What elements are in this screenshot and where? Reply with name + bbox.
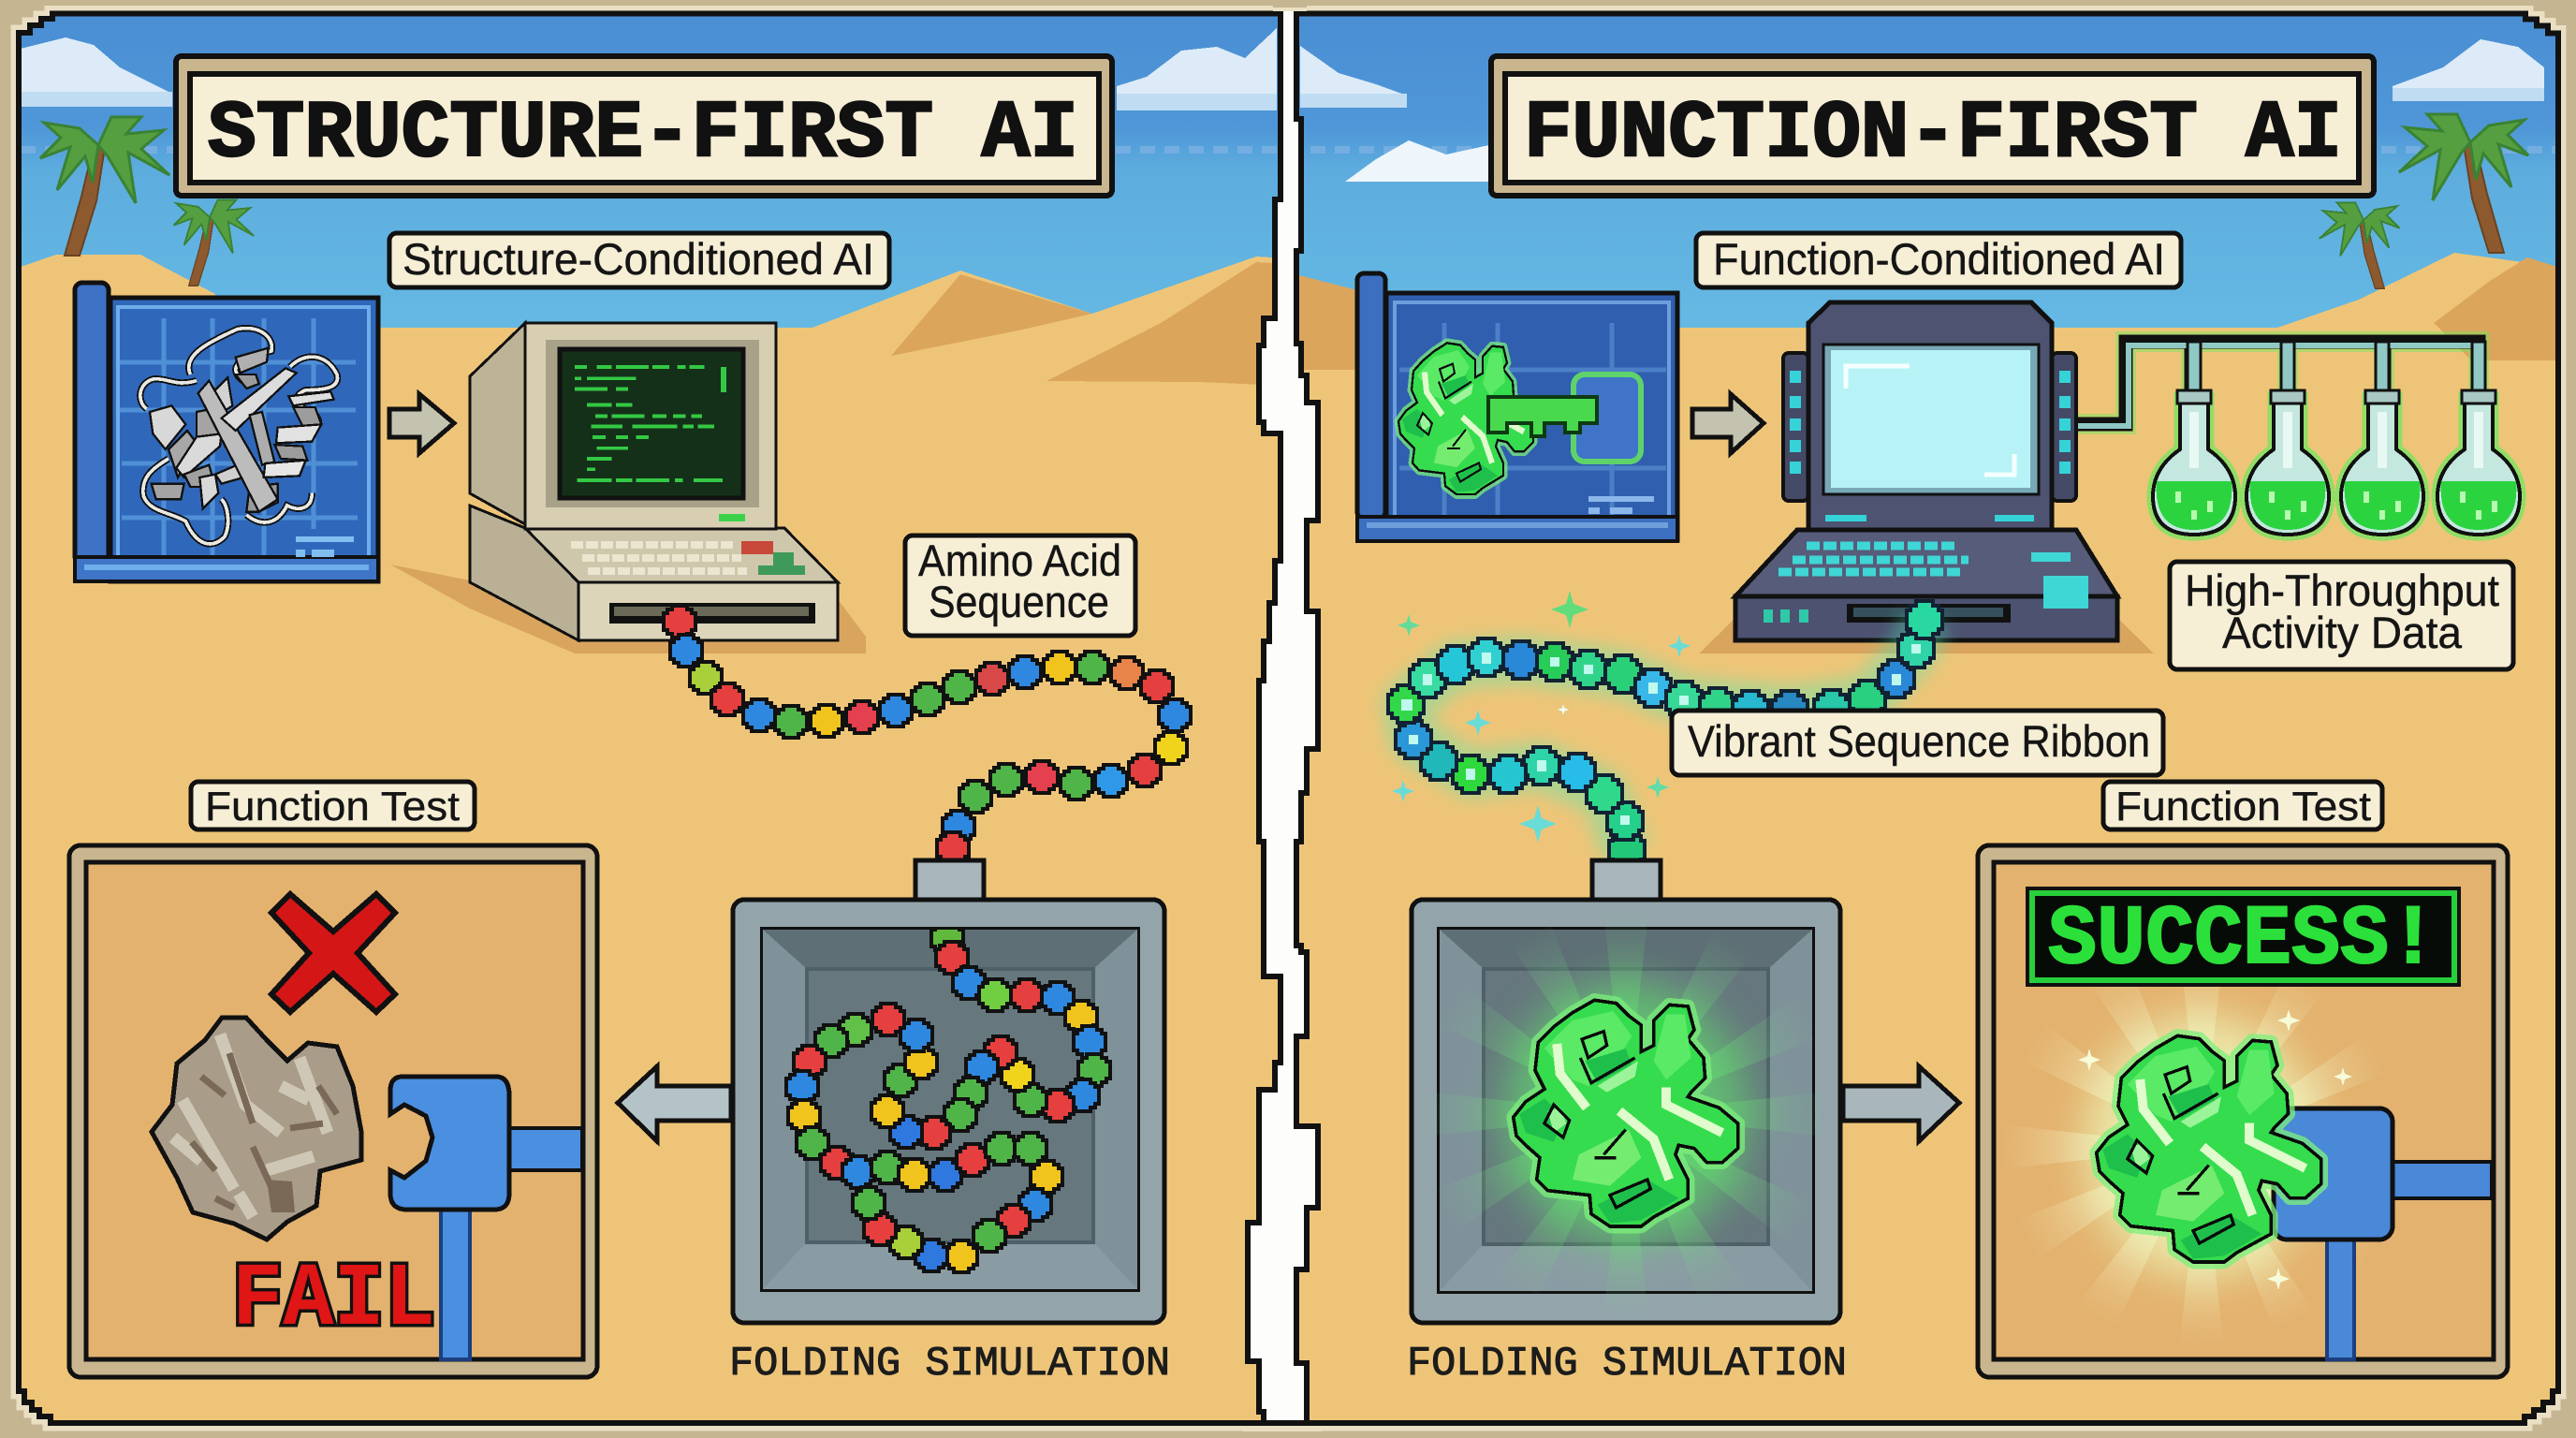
flask 3 [2341, 342, 2423, 535]
flask 2 [2247, 342, 2329, 535]
bead sequence: amino acid chain [664, 606, 1191, 864]
arrow: folding to failed test [618, 1066, 731, 1141]
label: Amino Acid Sequence: Amino Acid [918, 536, 1121, 585]
label: High-Throughput Activity Data: Activity Data [2222, 608, 2463, 657]
label: High-Throughput Activity Data: High-Throughput [2185, 565, 2499, 615]
small sparkles [2078, 1009, 2352, 1290]
base front [1735, 596, 2117, 640]
blueprint: green protein with key [1357, 273, 1677, 541]
right heading: Function-First AI: FUNCTION-FIRST AI [1524, 88, 2342, 180]
palm trees left [40, 117, 254, 286]
disk slot [609, 603, 815, 624]
caption: folding simulation right: FOLDING SIMULATION [1407, 1341, 1847, 1387]
status LED [719, 514, 745, 521]
futuristic computer [1699, 302, 2154, 653]
computer base [470, 323, 838, 640]
clouds [21, 28, 2544, 182]
soft pale halo [2085, 1016, 2319, 1278]
tangled bead chain [786, 922, 1110, 1272]
arrow: blueprint to computer [389, 394, 454, 453]
label: Amino Acid Sequence [905, 536, 1135, 636]
ribbon beads [1388, 601, 1942, 869]
label: Structure-Conditioned AI: Structure-Conditioned AI [402, 234, 874, 284]
crack top frame patch [1273, 0, 1307, 11]
label: Vibrant Sequence Ribbon: Vibrant Sequence Ribbon [1688, 716, 2150, 766]
crack bottom frame patch [1243, 1420, 1322, 1438]
green glow rays [1425, 913, 1827, 1315]
chamber frame [733, 900, 1164, 1323]
keyboard deck [1735, 530, 2117, 596]
chamber neck [915, 860, 984, 900]
disk slot [1847, 604, 2011, 623]
computer shadow [1699, 618, 2154, 653]
base lights [1764, 609, 1808, 623]
folding simulation chamber: glowing protein [1412, 860, 1840, 1323]
monitor screen with code lines [546, 340, 759, 507]
horizon water ripple band [21, 146, 2557, 154]
label: Function Test right: Function Test [2115, 784, 2371, 829]
right heading: Function-First AI [1491, 56, 2374, 196]
teal keys [1778, 546, 2088, 609]
side panels with LEDs [1783, 353, 2076, 501]
central crack divider [1251, 11, 1315, 1425]
icon: lock receptor [1573, 374, 1641, 462]
icon: green protein [1398, 343, 1533, 494]
ribbon bead highlights [1401, 644, 1921, 825]
control buttons [741, 541, 805, 575]
folding simulation chamber: tangled chain [733, 860, 1164, 1323]
label: Amino Acid Sequence: Sequence [929, 577, 1109, 626]
label: High-Throughput Activity Data [2170, 562, 2513, 669]
icon: receptor stem and head [2274, 1108, 2492, 1359]
icon: green key [1488, 397, 1597, 436]
chamber neck [1592, 860, 1661, 900]
glowing sequence ribbon [1388, 591, 1942, 869]
SUCCESS sign: SUCCESS! [2048, 893, 2437, 989]
chamber frame [1412, 900, 1840, 1323]
stand lights [1825, 515, 2034, 521]
cyan screen [1823, 345, 2039, 494]
icon: red X [271, 894, 395, 1012]
flask 1 [2153, 342, 2235, 535]
label: Function-Conditioned AI: Function-Conditioned AI [1713, 234, 2165, 284]
folded green protein [1514, 1000, 1738, 1226]
panel: successful function test [1978, 845, 2508, 1377]
sky [19, 14, 2561, 351]
green protein docked [2097, 1035, 2321, 1262]
label: Function Test left: Function Test [205, 784, 460, 829]
ribbon glow [1406, 620, 1925, 852]
dunes: right panel [1299, 253, 2555, 370]
retro computer [390, 323, 866, 653]
dunes: left panel [22, 255, 1272, 384]
FAIL text: FAIL [232, 1249, 435, 1351]
keyboard keys [571, 545, 747, 571]
sand ground [19, 328, 2561, 1428]
icon: misfolded rock protein [152, 1018, 361, 1240]
icon: blue receptor wrench [390, 1077, 582, 1359]
icon: gray protein ribbon [140, 329, 337, 544]
left heading: Structure-First AI: STRUCTURE-FIRST AI [208, 88, 1078, 180]
blueprint: gray protein structure [75, 283, 378, 581]
success light rays [2000, 946, 2403, 1348]
computer shadow [390, 565, 866, 653]
arrow: blueprint to AI computer [1692, 394, 1764, 453]
flask 4 [2437, 342, 2520, 535]
caption: folding simulation left: FOLDING SIMULATION [729, 1341, 1170, 1387]
pipes to flasks [2074, 342, 2479, 424]
palm trees right [2320, 114, 2528, 288]
sparkles [1392, 591, 1690, 843]
panel: failed function test [69, 845, 597, 1377]
arrow: folding to success test [1843, 1066, 1959, 1141]
soft green halo [1504, 983, 1748, 1245]
left heading: Structure-First AI [176, 56, 1112, 196]
monitor housing [1808, 302, 2052, 530]
